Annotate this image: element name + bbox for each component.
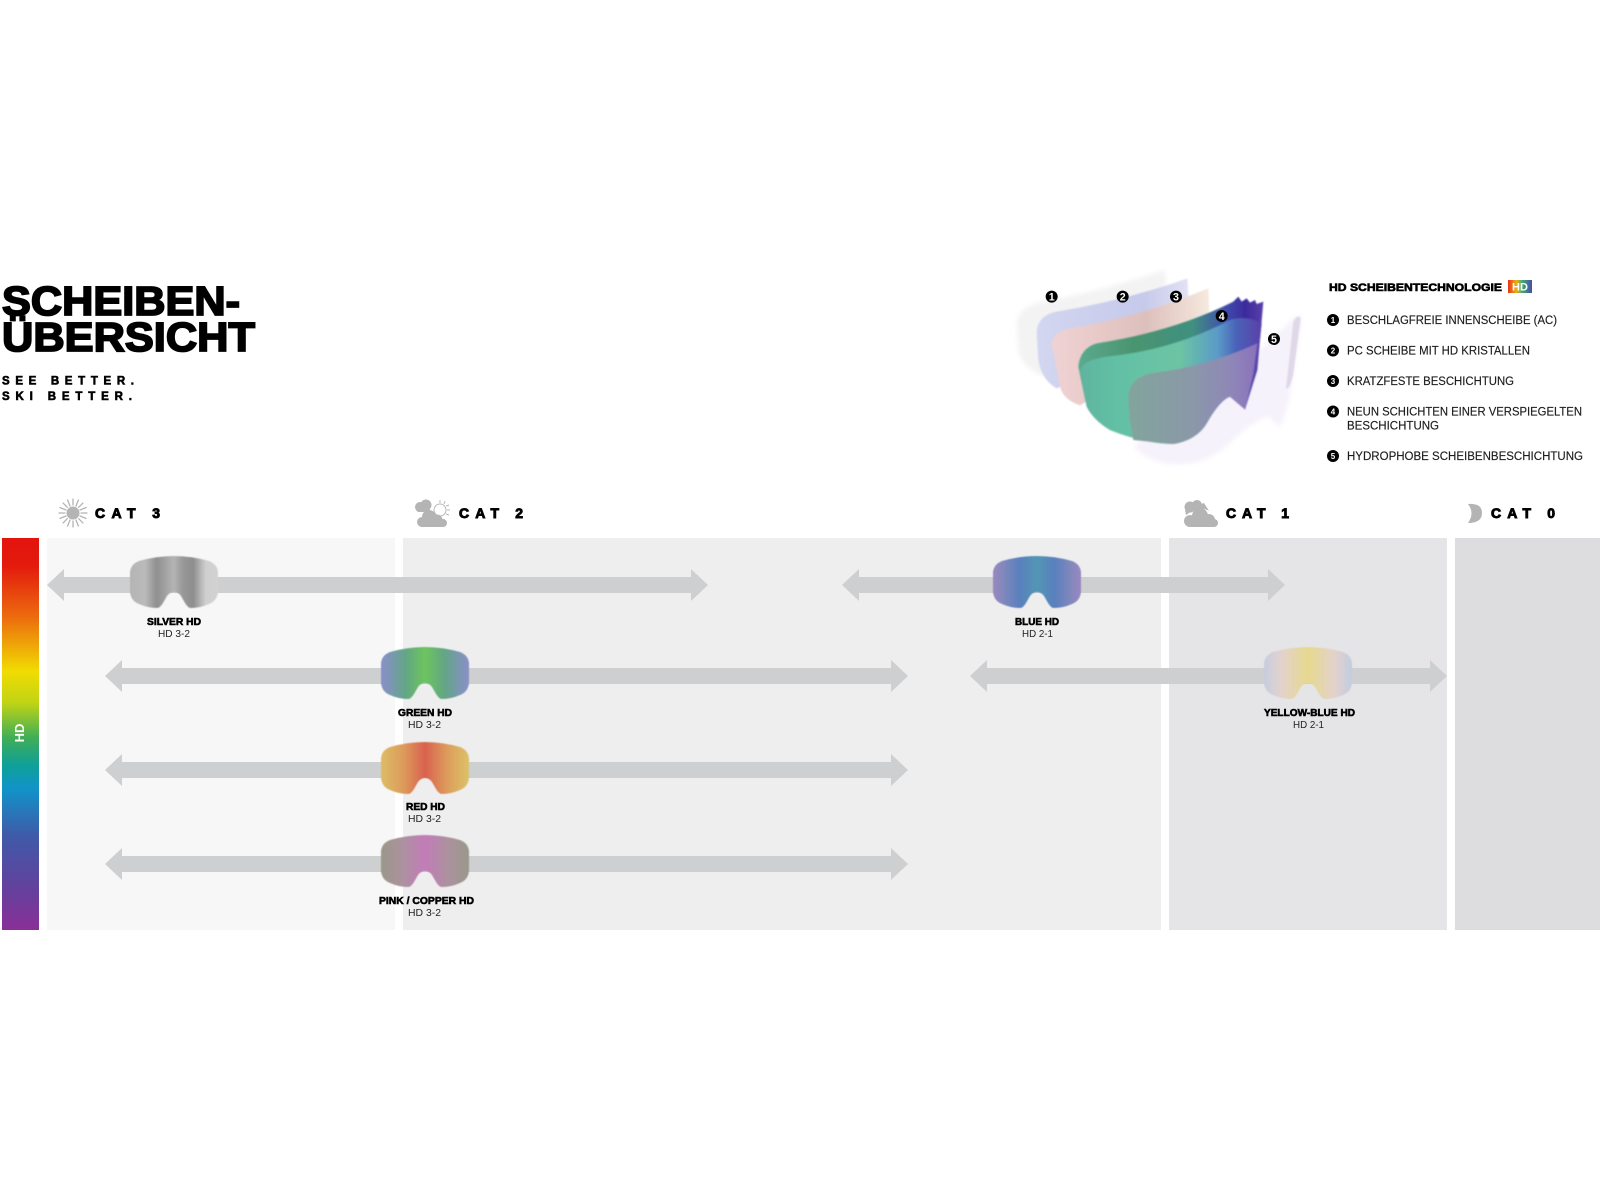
legend item 5: 5 [1331, 452, 1336, 461]
icon: cloud with sun [415, 500, 450, 527]
panel: CAT 0 [1455, 538, 1600, 930]
legend item 1: 1 [1331, 316, 1336, 325]
lens layer marker 3 [1170, 291, 1182, 304]
lens: blue: HD 2-1 [1022, 628, 1053, 640]
HD rainbow bar: HD [12, 724, 27, 742]
icon: clouds [1184, 500, 1218, 527]
panel: CAT 3 [47, 538, 395, 930]
legend item 3: 3 [1331, 377, 1336, 386]
lens: silver: SILVER HD [147, 616, 201, 628]
lens: red: HD 3-2 [408, 813, 441, 825]
lens: yellow-blue: HD 2-1 [1293, 719, 1324, 731]
arrow: blue range [842, 569, 1285, 601]
lens: yellow-blue: YELLOW-BLUE HD [1264, 707, 1355, 719]
tagline: SKI BETTER. [2, 391, 132, 403]
lens: blue: BLUE HD [1015, 616, 1059, 628]
legend item 5: HYDROPHOBE SCHEIBENBESCHICHTUNG [1347, 451, 1583, 463]
technology legend [1327, 280, 1583, 463]
lens: blue [993, 556, 1081, 640]
lens: silver: HD 3-2 [158, 628, 190, 640]
lens: red: RED HD [406, 801, 445, 813]
arrow: silver range [47, 569, 708, 601]
category header: CAT 2 [415, 500, 523, 527]
lens: pink / copper: PINK / COPPER HD [379, 895, 474, 907]
category header: CAT 3: CAT 3 [95, 505, 160, 521]
lens layer marker 5: 5 [1271, 334, 1277, 346]
legend heading: HD SCHEIBENTECHNOLOGIE [1329, 282, 1502, 294]
lens: green: HD 3-2 [408, 719, 441, 731]
lens: green: GREEN HD [398, 707, 452, 719]
HD rainbow bar [2, 538, 39, 930]
title: SCHEIBEN- [2, 278, 240, 324]
panel: CAT 1 [1169, 538, 1447, 930]
arrow: red range [105, 754, 908, 786]
legend item 4 [1327, 406, 1582, 432]
icon: sun [59, 499, 87, 527]
category header: CAT 2: CAT 2 [459, 505, 523, 521]
lens layer marker 3: 3 [1173, 292, 1179, 304]
tagline: SEE BETTER. [2, 376, 134, 388]
category header: CAT 3 [59, 499, 160, 527]
arrow: pink range [105, 848, 908, 880]
lens layer marker 4 [1216, 310, 1228, 323]
legend item 4: 4 [1331, 408, 1336, 416]
arrow: green range [105, 660, 908, 692]
category header: CAT 1 [1184, 500, 1289, 527]
lens: yellow-blue [1264, 647, 1355, 731]
lens layer marker 1: 1 [1049, 292, 1055, 304]
icon: moon [1468, 504, 1482, 523]
category header: CAT 0 [1468, 504, 1555, 523]
HD badge: HD [1512, 282, 1528, 294]
title: ÜBERSICHT [2, 314, 255, 360]
category header: CAT 1: CAT 1 [1226, 505, 1289, 521]
lens: pink / copper: HD 3-2 [408, 907, 441, 919]
exploded lens diagram [1017, 270, 1301, 465]
panel: CAT 2 [403, 538, 1161, 930]
tagline [2, 376, 134, 403]
legend item 3: KRATZFESTE BESCHICHTUNG [1347, 376, 1514, 388]
legend item 2: 2 [1331, 346, 1336, 356]
legend item 4: BESCHICHTUNG [1347, 420, 1439, 432]
title [2, 278, 255, 360]
lens layer marker 5 [1268, 333, 1280, 346]
lens: pink / copper [379, 835, 474, 919]
arrow: yellow-blue range [970, 660, 1447, 692]
lens layer marker 2 [1117, 291, 1129, 304]
lens layer marker 2: 2 [1120, 292, 1126, 304]
legend item 4: NEUN SCHICHTEN EINER VERSPIEGELTEN [1347, 406, 1582, 418]
lens: green [381, 647, 469, 731]
lens: red [381, 742, 469, 825]
HD badge [1508, 280, 1532, 294]
legend item 2: PC SCHEIBE MIT HD KRISTALLEN [1347, 346, 1530, 358]
lens: silver [130, 556, 218, 640]
lens layer marker 1 [1046, 291, 1058, 304]
legend item 1: BESCHLAGFREIE INNENSCHEIBE (AC) [1347, 315, 1557, 327]
lens layer marker 4: 4 [1219, 311, 1225, 323]
category header: CAT 0: CAT 0 [1491, 505, 1555, 521]
